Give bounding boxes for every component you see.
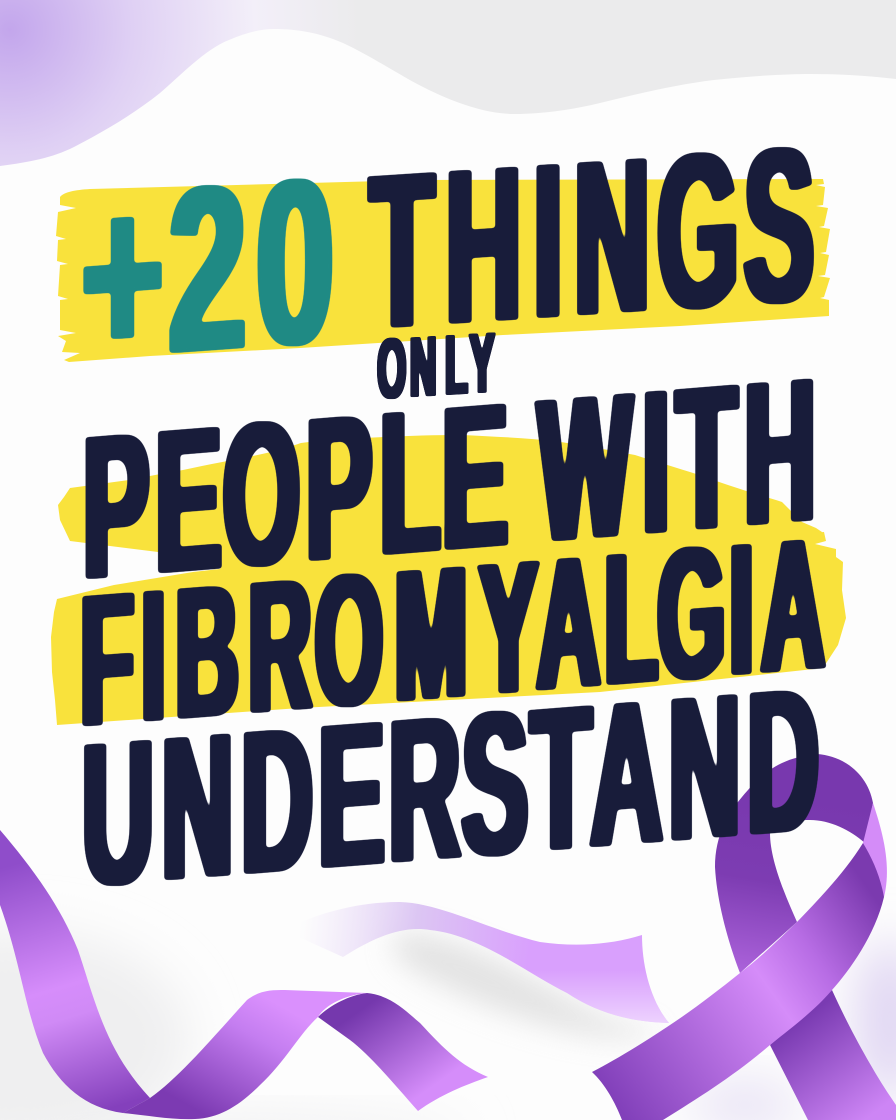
title: FIBROMYALGIA: FIBROMYALGIA xyxy=(80,498,825,765)
left ribbon xyxy=(0,830,488,1119)
title: THINGS: THINGS xyxy=(370,101,814,375)
right awareness ribbon xyxy=(592,754,896,1120)
title: +20: +20 xyxy=(81,128,334,408)
yellow brush stroke 1 xyxy=(56,179,830,362)
faded ribbon wave xyxy=(283,902,669,1023)
ribbon: back loop strand xyxy=(715,754,873,973)
ribbon: right tail xyxy=(770,990,896,1120)
title: UNDERSTAND: UNDERSTAND xyxy=(82,644,819,929)
yellow brush stroke 2 xyxy=(58,435,822,600)
ribbon segment: tail xyxy=(318,993,488,1111)
ribbon: light right edge xyxy=(863,803,887,897)
title text xyxy=(80,101,825,929)
background top band xyxy=(0,0,896,240)
ribbon: front band xyxy=(592,843,884,1120)
title: PEOPLE WITH: PEOPLE WITH xyxy=(83,335,816,622)
title: ONLY: ONLY xyxy=(377,315,494,416)
yellow brush stroke 3 xyxy=(51,532,846,725)
ribbon segment: descending xyxy=(0,830,150,1113)
background bottom soft shading xyxy=(0,930,896,1120)
ribbon segment: rising xyxy=(123,990,367,1119)
